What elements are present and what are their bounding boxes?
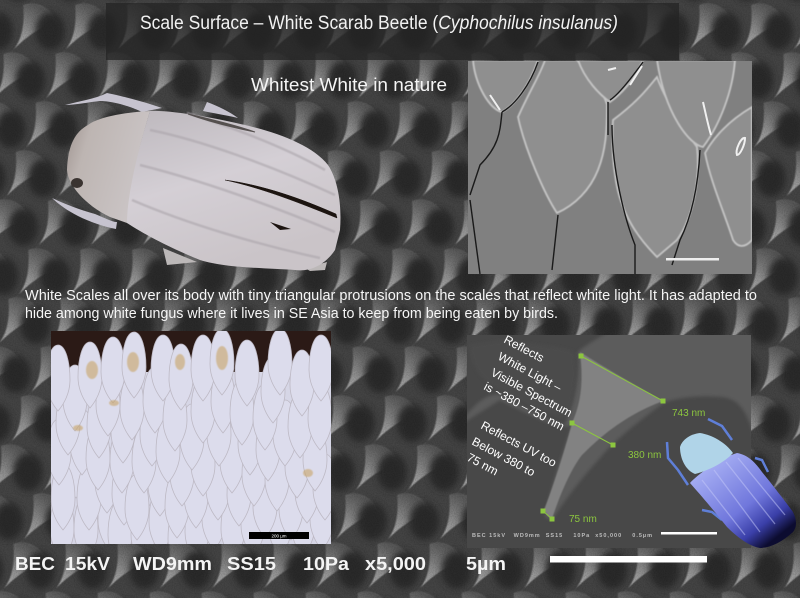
measurement labels [569, 408, 705, 525]
rotated annotation: reflects UV: Below 380 to [470, 434, 538, 479]
description paragraph [25, 288, 757, 322]
imaging parameters row: SS15 [227, 554, 276, 574]
overlapping scales [51, 331, 331, 544]
photo: white scales close-up [51, 331, 331, 544]
lighter upper region [460, 330, 760, 520]
scale bar [666, 258, 719, 260]
micrograph caption: BEC 15kV WD9mm SS15 10Pa x50,000 0.5µm [472, 533, 652, 539]
title bar [106, 3, 679, 60]
blue beetle head [680, 433, 733, 474]
beetle wing cases [127, 111, 341, 270]
scale bar 200 µm: 200 µm [271, 534, 287, 538]
debris highlights [490, 66, 745, 155]
description paragraph: White Scales all over its body with tiny triangular protrusions on the scales that reflect white light. It has adapted to [25, 288, 757, 304]
imaging parameters row: BEC [15, 554, 55, 574]
beetle wing crack [225, 180, 337, 218]
measurement labels: 380 nm [628, 450, 661, 461]
imaging parameters row: 15kV [65, 554, 110, 574]
subtitle: whitest white: Whitest White in nature [251, 75, 447, 95]
blue beetle body [690, 453, 796, 548]
imaging parameters row: x5,000 [365, 554, 426, 574]
blue beetle ridges [702, 458, 785, 535]
blue beetle legs [667, 419, 768, 520]
rotated annotation: reflects UV: 75 nm [465, 450, 501, 478]
spike body highlight [544, 352, 663, 519]
rotated annotation: reflects white light [482, 332, 574, 433]
dark gap left of spike [470, 340, 576, 418]
beetle thorax [67, 111, 150, 223]
measurement labels: 75 nm [569, 514, 597, 525]
photo: white scarab beetle [52, 93, 340, 271]
imaging parameters row: WD9mm [133, 554, 212, 574]
title bar: Scale Surface – White Scarab Beetle (Cyphochilus insulanus) [140, 13, 618, 34]
imaging parameters row [15, 554, 506, 574]
scale bar 200 µm [249, 532, 309, 539]
description paragraph: hide among white fungus where it lives in SE Asia to keep from being eaten by birds. [25, 306, 558, 322]
micrograph: scale overview [468, 60, 752, 274]
measurement lines [541, 354, 665, 521]
rotated annotation: reflects white light: Reflects [502, 332, 546, 365]
tan stains [73, 346, 313, 477]
imaging parameters row: 5µm [466, 554, 506, 574]
rotated annotation: reflects UV: Reflects UV too [479, 418, 559, 470]
main scale bar [550, 556, 707, 562]
beetle eye [71, 178, 83, 188]
micrograph scale bar [661, 532, 717, 534]
rotated annotation: reflects white light: Visible Spectrum [489, 365, 574, 420]
photo: blue UV-lit beetle [667, 419, 796, 548]
measurement labels: 743 nm [672, 408, 705, 419]
beetle legs and antennae [52, 93, 327, 271]
scale cracks [470, 62, 700, 274]
rotated annotation: reflects white light: White Light – [496, 349, 564, 395]
imaging parameters row: 10Pa [303, 554, 350, 574]
beetle wing ridges [132, 113, 335, 258]
micrograph: single spike with measurements [460, 330, 760, 548]
dark brown body strip [51, 331, 331, 372]
rotated annotation: reflects white light: is ~380 –750 nm [482, 379, 567, 433]
